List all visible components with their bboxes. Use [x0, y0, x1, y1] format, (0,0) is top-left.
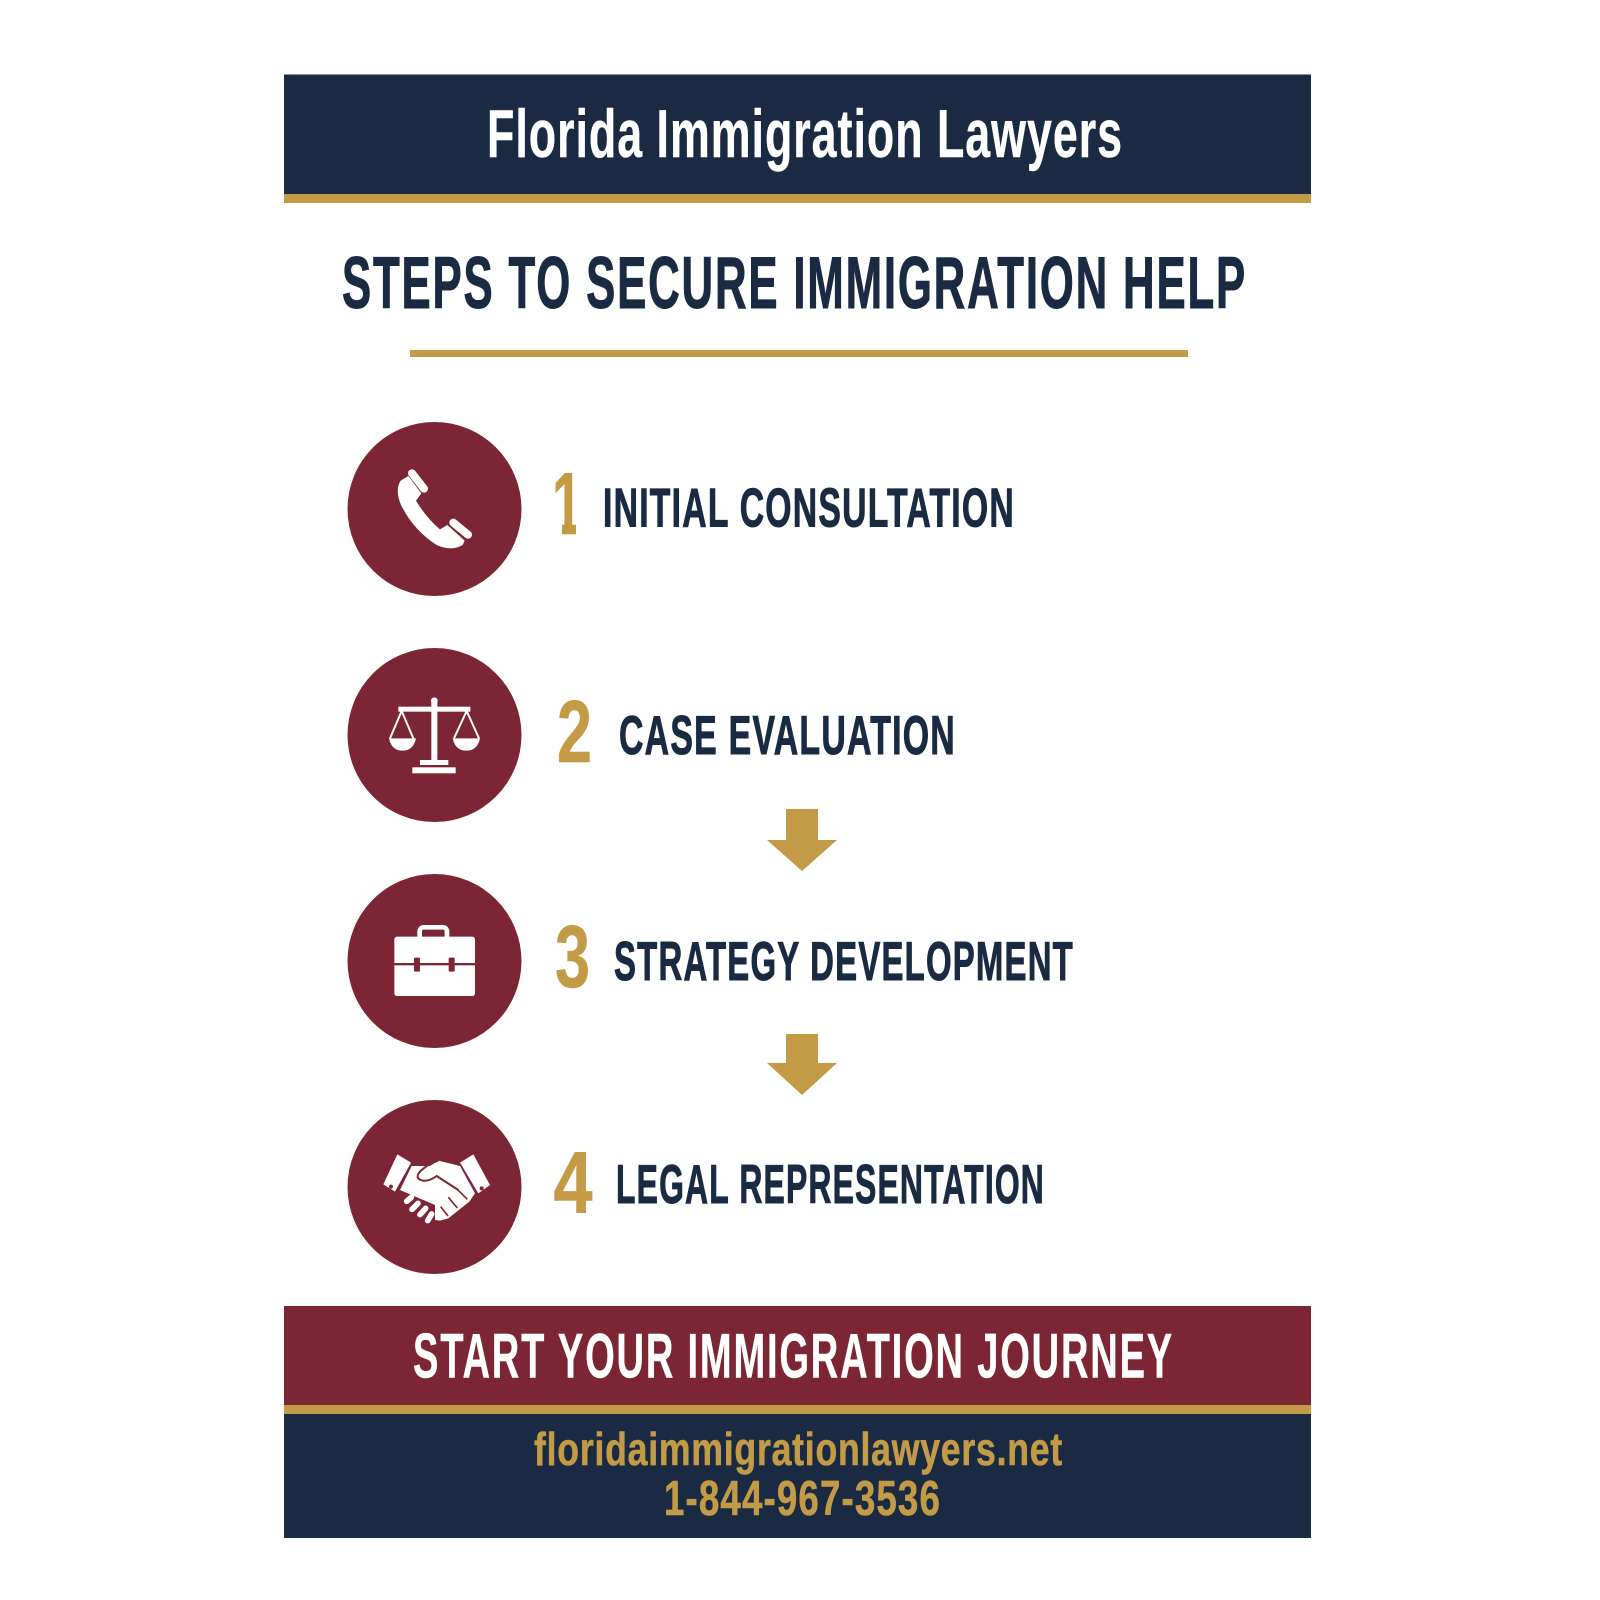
phone number: 1-844-967-3536 — [664, 1472, 941, 1526]
step number 1: 1 — [552, 454, 582, 553]
step 2: case evaluation — [348, 648, 956, 822]
step label 2: CASE EVALUATION — [619, 704, 956, 766]
step 4: legal representation — [348, 1100, 1045, 1274]
main heading — [342, 243, 1247, 357]
step label 3: STRATEGY DEVELOPMENT — [614, 930, 1074, 992]
step label 4: LEGAL REPRESENTATION — [616, 1153, 1045, 1215]
arrow down 2 — [767, 1034, 837, 1095]
infographic — [284, 74, 1311, 1538]
step number 2: 2 — [557, 682, 592, 781]
header banner — [284, 74, 1311, 203]
call to action band — [284, 1306, 1311, 1414]
icon: handshake — [383, 1154, 490, 1221]
website: floridaimmigrationlawyers.net — [534, 1423, 1063, 1475]
step 3: strategy development — [348, 874, 1074, 1048]
step 1: initial consultation — [348, 422, 1015, 596]
icon: scales of justice — [389, 697, 480, 773]
step number 4: 4 — [554, 1133, 593, 1232]
step number 3: 3 — [555, 907, 590, 1006]
step label 1: INITIAL CONSULTATION — [603, 476, 1015, 538]
banner title: Florida Immigration Lawyers — [487, 96, 1123, 172]
icon: briefcase — [394, 927, 475, 996]
arrow down 1 — [767, 809, 837, 871]
contact footer — [284, 1414, 1311, 1538]
icon: telephone — [398, 473, 468, 548]
